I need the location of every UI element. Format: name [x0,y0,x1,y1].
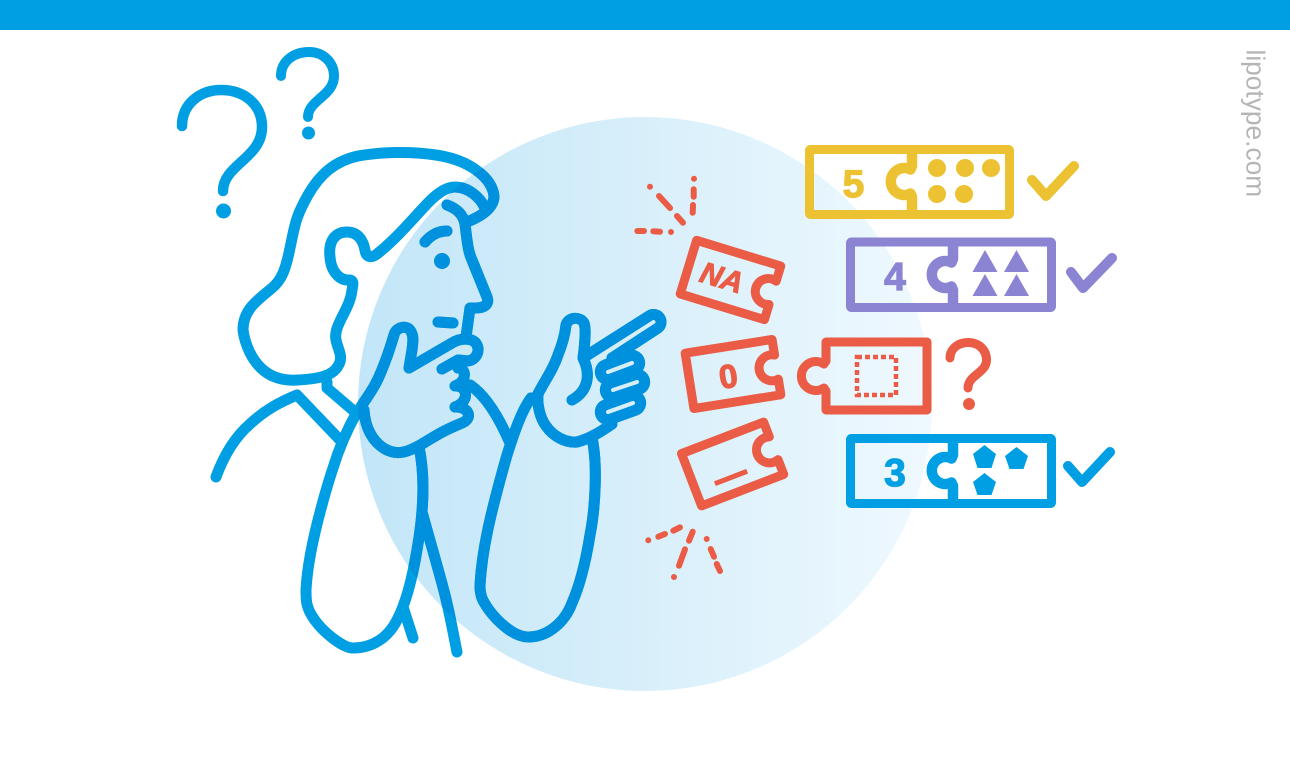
burst lines: bottom [648,527,720,577]
icon: yellow check [1032,166,1074,196]
person overlay: darker line tint where it crosses the circle [358,168,666,642]
top bar [0,0,1290,30]
yellow puzzle: 5 with dots: 5 [843,163,864,206]
ticket: NA [680,240,781,320]
icon: eye [434,253,450,269]
icon: small question mark [281,52,334,140]
icon: red question mark [950,342,986,410]
icon: blue check [1068,452,1110,482]
purple puzzle: 4 with triangles [850,242,1052,308]
burst lines: top [637,179,694,232]
watermark: lipotype.com: lipotype.com [1240,50,1270,197]
purple puzzle: 4 with triangles: 4 [884,256,906,299]
ticket: 0 [685,339,781,409]
ticket: NA: NA [696,256,747,300]
red puzzle piece with empty slot [801,342,927,410]
yellow puzzle: 5 with dots [810,150,1010,214]
ticket: 0: 0 [716,357,740,396]
blue puzzle: 3 with pentagons: 3 [884,452,906,495]
person: thinking scientist line drawing [216,152,661,652]
background circle [358,117,932,691]
icon: purple check [1071,258,1112,288]
ticket: dash [681,422,784,506]
icon: large question mark [182,90,262,218]
blue puzzle: 3 with pentagons [850,438,1052,504]
